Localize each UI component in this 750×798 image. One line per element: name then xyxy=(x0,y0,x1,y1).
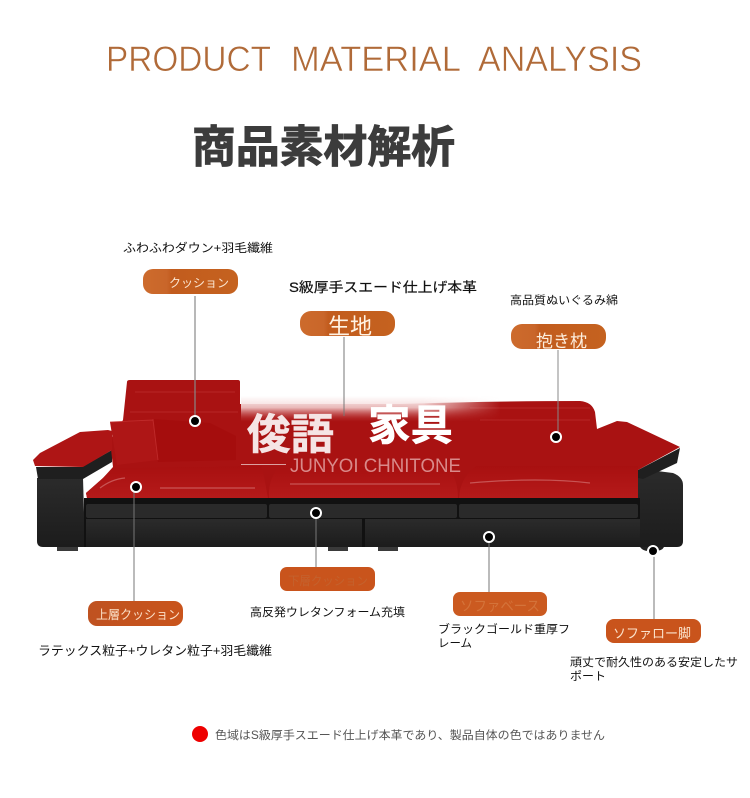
lower cushion label: 下層クッション xyxy=(288,574,368,588)
sofa base description: ブラックゴールド重厚フ xyxy=(438,622,570,636)
sofa base description: レーム xyxy=(438,637,472,650)
callout: sofa base xyxy=(438,532,570,650)
fabric description: S級厚手スエード仕上げ本革 xyxy=(289,280,477,295)
callout: throw pillow xyxy=(510,293,618,442)
pillow label xyxy=(511,324,606,351)
color note xyxy=(192,726,605,742)
sofa base label: ソファベース xyxy=(460,598,540,614)
fabric label: 生地 xyxy=(328,314,372,339)
brand watermark: 俊語 xyxy=(247,411,334,458)
brand watermark: 家具 xyxy=(368,402,453,449)
title: ANALYSIS xyxy=(478,40,642,79)
callout: cushion xyxy=(123,240,273,426)
sofa black base xyxy=(36,448,683,551)
upper cushion description: ラテックス粒子+ウレタン粒子+羽毛纖維 xyxy=(38,643,273,658)
pillow description: 高品質ぬいぐるみ綿 xyxy=(510,293,618,307)
upper cushion label: 上層クッション xyxy=(96,608,180,622)
brand watermark: JUNYOI CHNITONE xyxy=(290,456,461,477)
icon: red dot xyxy=(192,726,208,742)
subtitle: 商品素材解析 xyxy=(192,123,455,172)
lower cushion label xyxy=(280,567,375,591)
sofa leg label xyxy=(606,619,701,643)
brand watermark xyxy=(241,402,461,477)
sofa leg label: ソファロー脚 xyxy=(613,626,691,641)
fabric label xyxy=(300,311,395,339)
cushion label: クッション xyxy=(169,276,229,290)
sofa red upholstery xyxy=(33,380,680,503)
lower cushion description: 高反発ウレタンフォーム充填 xyxy=(250,605,406,619)
note text: 色域はS級厚手スエード仕上げ本革であり、製品自体の色ではありません xyxy=(215,728,605,742)
callout: fabric xyxy=(289,280,477,416)
white fade over backrest xyxy=(241,398,498,420)
callout: sofa leg xyxy=(570,546,738,683)
title: MATERIAL xyxy=(291,40,461,79)
cushion label xyxy=(143,269,238,294)
title xyxy=(106,40,642,79)
title: PRODUCT xyxy=(106,40,271,79)
sofa illustration xyxy=(33,380,683,551)
pillow label: 抱き枕 xyxy=(536,332,587,351)
sofa leg description: 頑丈で耐久性のある安定したサ xyxy=(570,655,738,669)
upper cushion label xyxy=(88,601,183,626)
callout: lower cushion xyxy=(250,508,406,619)
sofa leg description: ポート xyxy=(570,670,606,683)
callout: upper cushion xyxy=(38,482,273,658)
cushion description: ふわふわダウン+羽毛纖維 xyxy=(123,240,273,255)
